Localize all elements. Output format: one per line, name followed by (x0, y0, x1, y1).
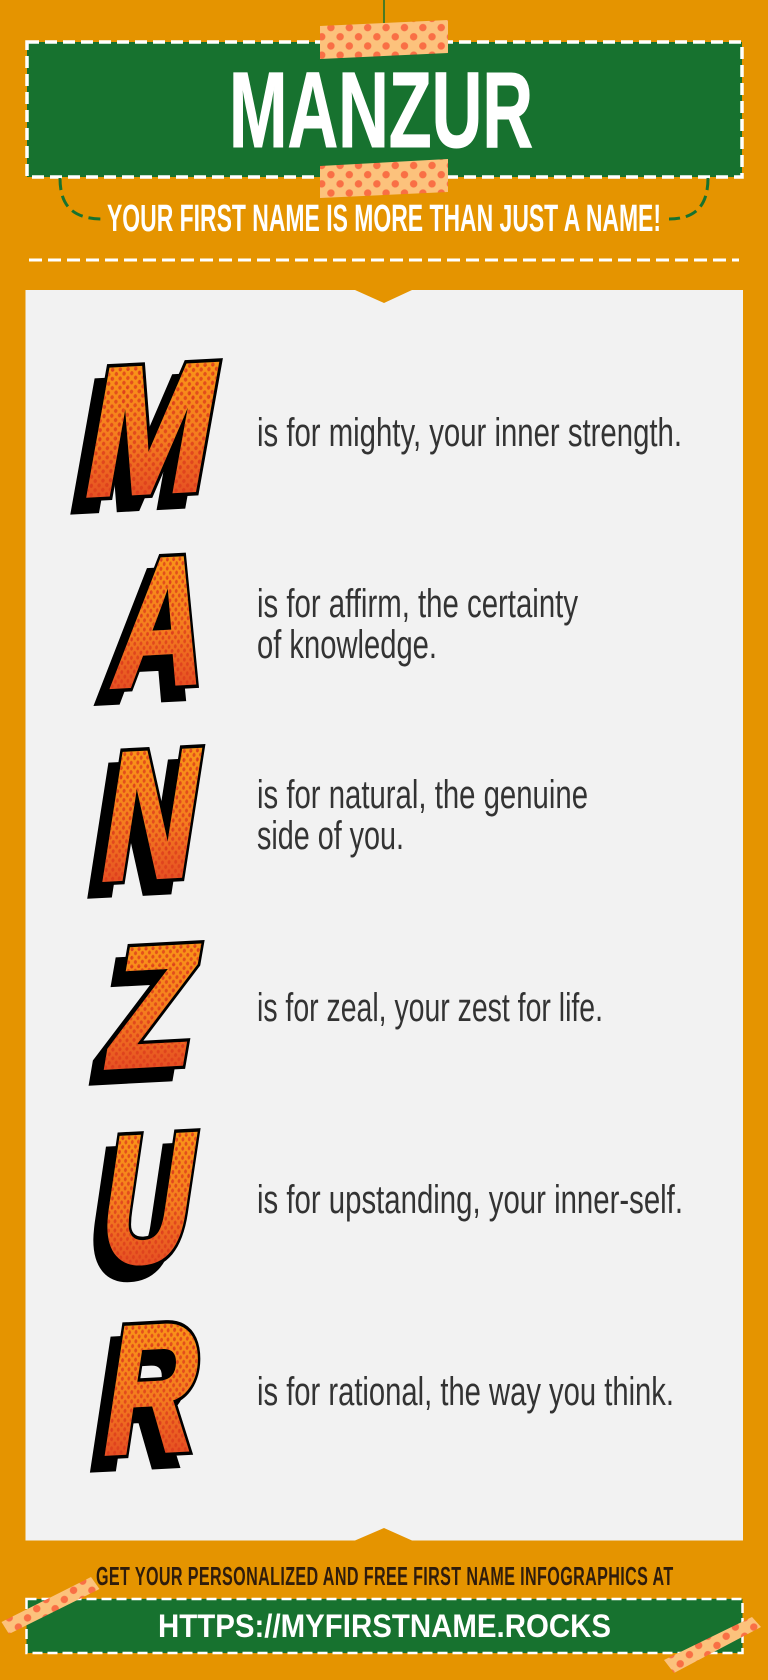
letter R: R (104, 1285, 198, 1492)
left bracket (60, 178, 103, 219)
letter Z: Z (105, 910, 200, 1104)
letter M: M (85, 326, 218, 534)
letter U: U (89, 1109, 185, 1315)
letter U: U (101, 1095, 197, 1302)
letter A: A (111, 518, 206, 725)
url: HTTPS://MYFIRSTNAME.ROCKS (158, 1608, 611, 1644)
letter U: U (101, 1095, 197, 1302)
title banner (27, 20, 742, 198)
text N: side of you. (257, 814, 404, 858)
letter N: N (102, 712, 201, 918)
top tape (320, 20, 448, 59)
letter N: N (102, 712, 201, 918)
text A (257, 582, 578, 667)
letter M: M (73, 340, 205, 548)
url banner (26, 1599, 742, 1653)
letter U: U (101, 1095, 197, 1302)
main panel (26, 290, 743, 1540)
letter Z: Z (93, 922, 187, 1117)
letter R: R (92, 1299, 186, 1505)
text A: of knowledge. (257, 623, 437, 667)
left tape (2, 1577, 100, 1634)
hanging line (383, 0, 385, 26)
letter M: M (85, 326, 218, 534)
letter Z: Z (105, 910, 200, 1104)
letter R: R (104, 1285, 198, 1492)
letter N: N (102, 712, 201, 918)
text N (257, 773, 588, 858)
letter Z: Z (105, 910, 200, 1104)
footer call to action: GET YOUR PERSONALIZED AND FREE FIRST NAME INFOGRAPHICS AT (96, 1561, 673, 1591)
letter A: A (111, 518, 206, 725)
text N: is for natural, the genuine (257, 773, 588, 817)
bottom tape (320, 159, 448, 198)
title: MANZUR (229, 49, 533, 170)
letter N: N (89, 726, 189, 932)
dashed divider (29, 258, 739, 262)
letter R: R (104, 1285, 198, 1492)
right bracket (669, 178, 708, 219)
text A: is for affirm, the certainty (257, 582, 578, 626)
letter A: A (111, 518, 206, 725)
right tape (664, 1617, 761, 1673)
letter M: M (85, 326, 218, 534)
text Z: is for zeal, your zest for life. (257, 986, 603, 1030)
letter A: A (99, 532, 194, 739)
